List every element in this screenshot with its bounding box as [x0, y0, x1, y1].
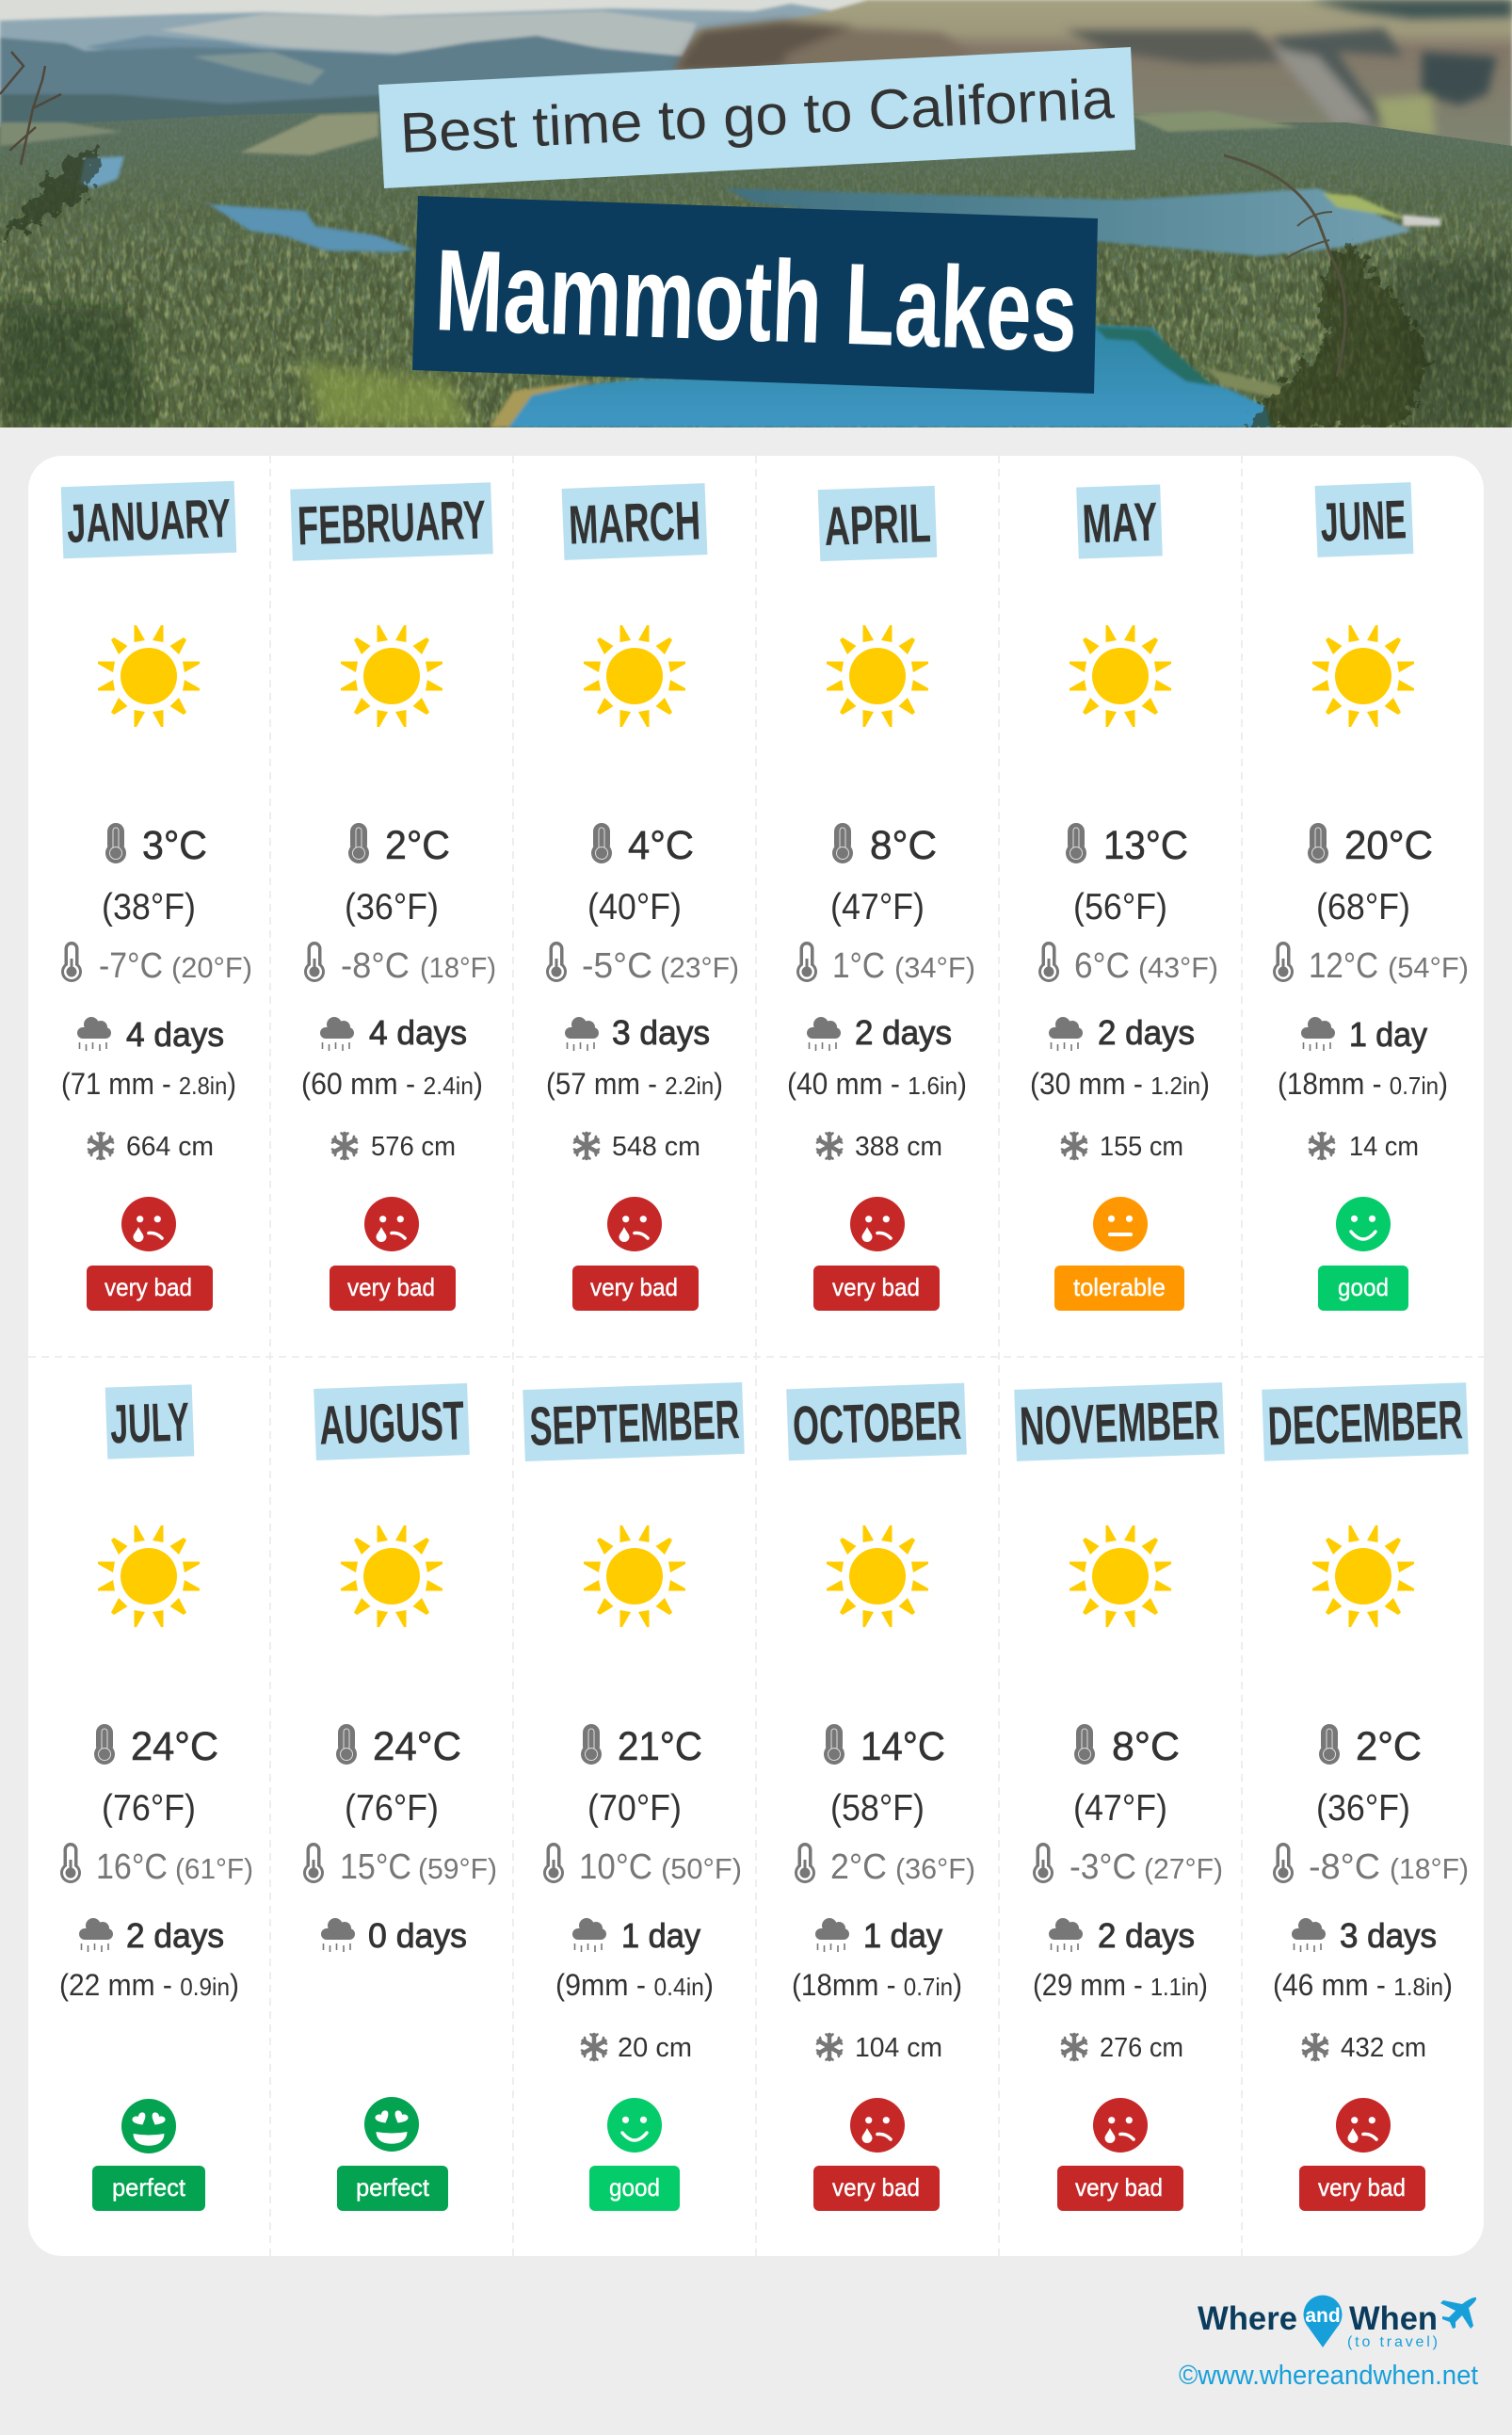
high temperature: (76°F): [345, 1788, 439, 1829]
rating: very bad: [572, 1197, 699, 1311]
rating: good: [1318, 1197, 1408, 1311]
snow: 20 cm: [618, 2033, 692, 2063]
icon: sun: [1312, 625, 1414, 727]
low temperature: 12°C: [1309, 946, 1378, 986]
snow: [88, 1132, 214, 1162]
high temperature: 24°C: [131, 1724, 218, 1769]
high temperature: (56°F): [1073, 887, 1167, 927]
low temperature: (23°F): [660, 951, 739, 984]
mesa details: [674, 0, 1512, 137]
low temperature: [304, 942, 496, 986]
icon: sun: [584, 1525, 685, 1627]
high temperature: 4°C: [628, 823, 694, 868]
high temperature: (40°F): [587, 887, 682, 927]
rain: 3 days: [1340, 1916, 1437, 1955]
rain: [546, 1013, 723, 1101]
rain: (29 mm - 1.1in): [1033, 1968, 1208, 2002]
rain: [555, 1916, 714, 2002]
rain: 4 days: [369, 1013, 467, 1052]
month heading: [314, 1383, 470, 1460]
low temperature: [543, 1843, 742, 1887]
rating: very bad: very bad: [590, 1273, 678, 1301]
rating: perfect: [337, 2097, 448, 2211]
rating: good: [589, 2098, 680, 2211]
website credit: ©www.whereandwhen.net: [1179, 2361, 1478, 2391]
rain: [787, 1013, 967, 1101]
low temperature: (50°F): [661, 1852, 742, 1885]
snow: [1303, 2033, 1426, 2063]
high temperature: 20°C: [1344, 823, 1433, 868]
snow: [1062, 2033, 1183, 2063]
panel: May: [1030, 484, 1218, 1311]
icon: sun: [341, 1525, 442, 1627]
low temperature: 10°C: [579, 1847, 652, 1887]
low temperature: (59°F): [418, 1852, 497, 1885]
rain: [61, 1015, 236, 1101]
panel: March: [546, 483, 739, 1311]
rating: very bad: very bad: [105, 1273, 192, 1301]
high temperature: (47°F): [830, 887, 925, 927]
rain: (18mm - 0.7in): [1278, 1067, 1448, 1101]
icon: sun: [1070, 1525, 1171, 1627]
low temperature: (36°F): [895, 1852, 975, 1885]
month heading: AUGUST: [318, 1390, 465, 1457]
rain: 0 days: [368, 1916, 467, 1955]
rain: (57 mm - 2.2in): [546, 1067, 723, 1101]
high temperature: 8°C: [870, 823, 937, 868]
snow: 388 cm: [855, 1132, 942, 1162]
rating: very bad: [813, 1197, 940, 1311]
low temperature: [1038, 942, 1218, 986]
rain: 2 days: [126, 1916, 224, 1955]
low temperature: (18°F): [420, 951, 496, 984]
rating: very bad: [87, 1197, 213, 1311]
icon: sun: [584, 625, 685, 727]
snow: 14 cm: [1349, 1132, 1419, 1162]
month heading: JULY: [109, 1392, 190, 1455]
low temperature: (43°F): [1138, 951, 1218, 984]
rating: very bad: very bad: [1075, 2173, 1163, 2201]
foreground trees: [0, 52, 1431, 427]
icon: airplane: [1440, 2298, 1476, 2329]
rating: good: good: [609, 2173, 660, 2201]
high temperature: (76°F): [102, 1788, 196, 1829]
rating: very bad: very bad: [347, 1273, 435, 1301]
snow: [817, 2033, 942, 2063]
low temperature: (18°F): [1390, 1852, 1469, 1885]
rain: [321, 1916, 467, 1955]
icon: sun: [1070, 625, 1171, 727]
low temperature: [61, 942, 252, 986]
high temperature: [581, 1724, 702, 1829]
rating: very bad: very bad: [1318, 2173, 1406, 2201]
rain: [1278, 1015, 1448, 1101]
icon: sun: [1312, 1525, 1414, 1627]
high temperature: [824, 1724, 945, 1829]
high temperature: [345, 823, 450, 927]
icon: sun: [827, 1525, 928, 1627]
rating: tolerable: tolerable: [1073, 1273, 1166, 1301]
high temperature: [1073, 1724, 1180, 1829]
snow: 276 cm: [1100, 2033, 1183, 2063]
rain: [59, 1916, 239, 2002]
rating: very bad: [1057, 2098, 1183, 2211]
low temperature: [795, 1843, 975, 1887]
month heading: [562, 483, 707, 560]
month heading: [1014, 1382, 1225, 1461]
panel: subtitle banner: [378, 47, 1135, 188]
hero photo: alpine lake landscape: [0, 0, 1512, 427]
rain: [1273, 1916, 1453, 2002]
logo: Where and When: Where: [1198, 2300, 1297, 2337]
high temperature: [830, 823, 937, 927]
hero shading: light and shadow areas: [0, 254, 1512, 427]
high temperature: 14°C: [861, 1724, 945, 1769]
rain: (60 mm - 2.4in): [301, 1067, 483, 1101]
high temperature: 2°C: [385, 823, 450, 868]
snow: [574, 1132, 700, 1162]
panel: January: [61, 481, 252, 1311]
low temperature: (61°F): [175, 1852, 253, 1885]
panel: February: [290, 482, 496, 1311]
icon: sun: [341, 625, 442, 727]
rain: (18mm - 0.7in): [792, 1968, 962, 2002]
month heading: [290, 482, 493, 561]
icon: sun: [827, 625, 928, 727]
panel: title banner: [412, 196, 1098, 394]
rating: tolerable: [1054, 1197, 1184, 1311]
low temperature: (20°F): [171, 951, 252, 984]
title text: Mammoth Lakes: [433, 226, 1079, 377]
low temperature: [1273, 1843, 1469, 1887]
high temperature: 13°C: [1103, 823, 1188, 868]
high temperature: (38°F): [102, 887, 196, 927]
month heading: SEPTEMBER: [528, 1389, 741, 1458]
hero lakes: [80, 156, 1440, 427]
month heading: APRIL: [823, 492, 932, 557]
rating: good: good: [1338, 1273, 1389, 1301]
low temperature: [60, 1843, 253, 1887]
month heading: OCTOBER: [792, 1390, 962, 1457]
month heading: [523, 1382, 745, 1461]
low temperature: (34°F): [894, 951, 975, 984]
high temperature: [587, 823, 694, 927]
rain: 4 days: [126, 1015, 224, 1054]
month heading: [1076, 484, 1163, 559]
snow: [582, 2033, 692, 2063]
snow: 104 cm: [855, 2033, 942, 2063]
rain: 1 day: [621, 1916, 700, 1955]
rating: perfect: perfect: [112, 2173, 186, 2201]
low temperature: -8°C: [341, 946, 410, 986]
low temperature: [1033, 1843, 1223, 1887]
high temperature: [1316, 1724, 1422, 1829]
logo: Where and When: [1198, 2296, 1476, 2350]
icon: sun: [98, 625, 200, 727]
snow: [1062, 1132, 1183, 1162]
low temperature: 16°C: [96, 1847, 168, 1887]
rain: 2 days: [1098, 1916, 1195, 1955]
month heading: [786, 1383, 967, 1460]
month heading: [61, 481, 236, 558]
high temperature: (36°F): [1316, 1788, 1410, 1829]
low temperature: -7°C: [99, 946, 163, 986]
snow: 576 cm: [371, 1132, 456, 1162]
rain: (9mm - 0.4in): [555, 1968, 714, 2002]
high temperature: 21°C: [618, 1724, 702, 1769]
snow: 664 cm: [126, 1132, 214, 1162]
panel: June: [1273, 482, 1469, 1311]
rain: (22 mm - 0.9in): [59, 1968, 239, 2002]
icon: map pin: [1304, 2296, 1343, 2347]
rain: (40 mm - 1.6in): [787, 1067, 967, 1101]
high temperature: (47°F): [1073, 1788, 1167, 1829]
snow: 155 cm: [1100, 1132, 1183, 1162]
panel: September: [523, 1382, 745, 2211]
rain: 3 days: [612, 1013, 710, 1052]
rain: (71 mm - 2.8in): [61, 1067, 236, 1101]
month heading: JUNE: [1319, 489, 1407, 554]
icon: map pin: and: [1305, 2305, 1341, 2327]
month heading: JANUARY: [66, 488, 232, 555]
low temperature: -8°C: [1309, 1847, 1380, 1887]
logo: Where and When: (to travel): [1347, 2334, 1438, 2350]
rain: [1030, 1013, 1210, 1101]
low temperature: -5°C: [582, 946, 652, 986]
icon: sun: [98, 1525, 200, 1627]
high temperature: 2°C: [1356, 1724, 1422, 1769]
rain: (46 mm - 1.8in): [1273, 1968, 1453, 2002]
rating: perfect: [92, 2099, 205, 2211]
high temperature: (36°F): [345, 887, 439, 927]
high temperature: [102, 823, 207, 927]
logo: Where and When: When: [1349, 2300, 1438, 2337]
low temperature: (54°F): [1388, 951, 1469, 984]
rating: perfect: perfect: [356, 2173, 430, 2201]
panel: November: [1014, 1382, 1225, 2211]
low temperature: [303, 1843, 497, 1887]
high temperature: [1066, 823, 1188, 927]
high temperature: [1308, 823, 1433, 927]
low temperature: [796, 942, 975, 986]
panel: monthly calendar card: [28, 456, 1484, 2256]
high temperature: 8°C: [1112, 1724, 1180, 1769]
low temperature: (27°F): [1144, 1852, 1223, 1885]
snow: [1310, 1132, 1419, 1162]
rain: 1 day: [863, 1916, 942, 1955]
high temperature: (68°F): [1316, 887, 1410, 927]
rain: [1033, 1916, 1208, 2002]
panel: August: [303, 1383, 497, 2211]
month heading: [1315, 482, 1413, 557]
rain: [792, 1916, 962, 2002]
panel: October: [786, 1383, 975, 2211]
low temperature: 1°C: [832, 946, 885, 986]
high temperature: (58°F): [830, 1788, 925, 1829]
high temperature: 24°C: [373, 1724, 461, 1769]
rating: very bad: very bad: [832, 2173, 920, 2201]
subtitle text: Best time to go to California: [398, 67, 1116, 165]
snow: [332, 1132, 456, 1162]
month heading: [818, 486, 937, 561]
month heading: [105, 1384, 194, 1459]
rating: very bad: [330, 1197, 456, 1311]
low temperature: 15°C: [340, 1847, 411, 1887]
low temperature: [546, 942, 739, 986]
month heading: FEBRUARY: [297, 490, 487, 556]
snow: [817, 1132, 942, 1162]
panel: December: [1262, 1382, 1469, 2211]
snow: 548 cm: [612, 1132, 700, 1162]
rain: 2 days: [1098, 1013, 1195, 1052]
high temperature: 3°C: [142, 823, 207, 868]
rating: very bad: [1299, 2098, 1425, 2211]
month heading: MARCH: [568, 490, 701, 556]
low temperature: [1273, 942, 1469, 986]
rating: very bad: very bad: [832, 1273, 920, 1301]
high temperature: [94, 1724, 218, 1829]
high temperature: [336, 1724, 461, 1829]
panel: July: [59, 1384, 253, 2211]
rain: 1 day: [1349, 1015, 1427, 1054]
low temperature: 2°C: [830, 1847, 887, 1887]
rain: [301, 1013, 483, 1101]
low temperature: -3°C: [1070, 1847, 1136, 1887]
rain: (30 mm - 1.2in): [1030, 1067, 1210, 1101]
low temperature: 6°C: [1074, 946, 1130, 986]
month heading: MAY: [1081, 492, 1159, 555]
snow: 432 cm: [1341, 2033, 1426, 2063]
high temperature: (70°F): [587, 1788, 682, 1829]
month heading: NOVEMBER: [1019, 1389, 1220, 1458]
panel: April: [787, 486, 975, 1311]
rating: very bad: [813, 2098, 940, 2211]
rain: 2 days: [855, 1013, 952, 1052]
